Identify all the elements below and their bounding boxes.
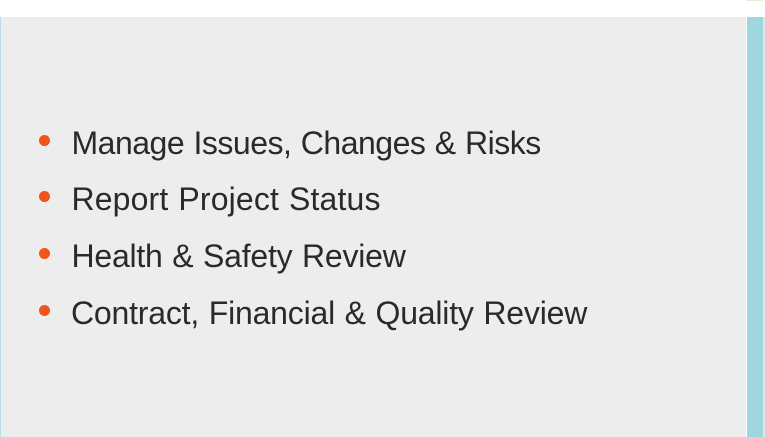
bullet list bbox=[39, 125, 588, 331]
bullet item 1: Manage Issues, Changes & Risks bbox=[72, 125, 541, 161]
right edge stripe bbox=[763, 17, 765, 437]
right teal bar bbox=[747, 17, 763, 437]
top corner accent bbox=[746, 0, 763, 1]
left edge stripe bbox=[0, 17, 1, 437]
bullet item 2: Report Project Status bbox=[72, 181, 381, 217]
bullet item 3: Health & Safety Review bbox=[72, 238, 406, 274]
bullet item 4: Contract, Financial & Quality Review bbox=[71, 295, 587, 331]
